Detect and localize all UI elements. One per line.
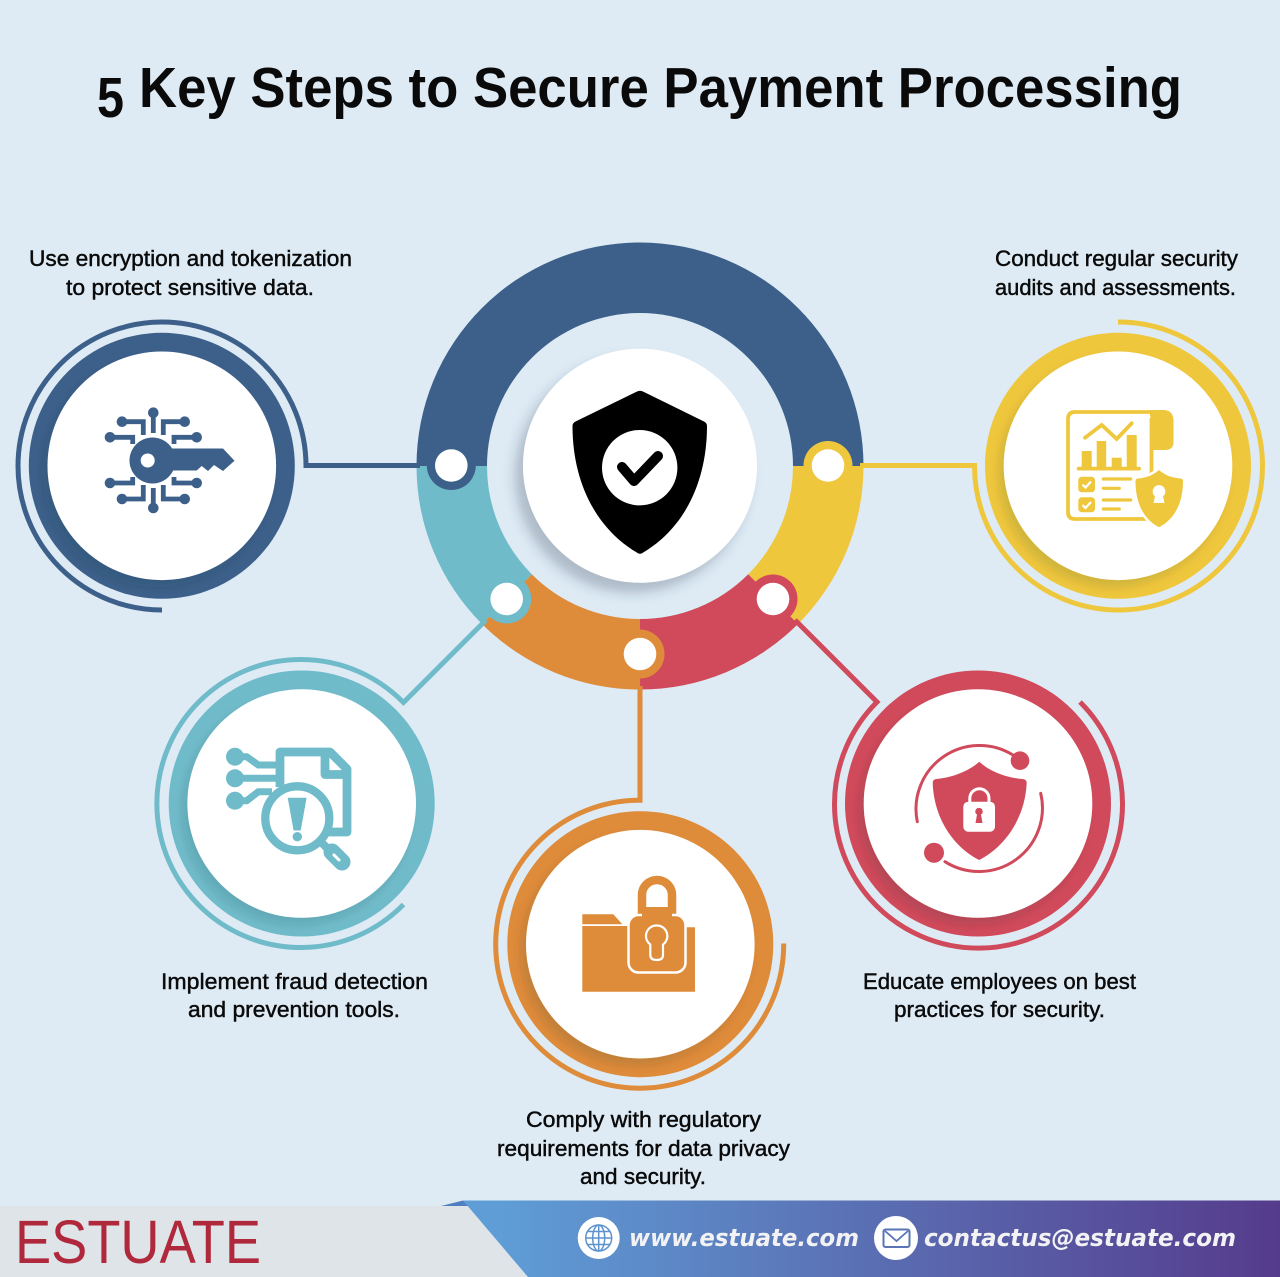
- text: step 4: [497, 1107, 790, 1189]
- text: step 3: Implement fraud detection: [161, 969, 428, 994]
- connector and outer arc: blue: [18, 322, 420, 610]
- text: step 2: audits and assessments.: [995, 275, 1236, 300]
- panel: step 3 fraud detection (teal): [157, 620, 486, 1022]
- knob: orange: [616, 630, 664, 678]
- ring: red: [845, 670, 1111, 936]
- text: step 2: Conduct regular security: [995, 246, 1238, 271]
- ring segment: blue: [416, 243, 864, 466]
- knob: yellow: [804, 441, 852, 490]
- knob: blue: [427, 441, 476, 490]
- icon: document with magnifier alert: [226, 748, 347, 862]
- title: 5: [97, 66, 124, 130]
- connector and outer arc: yellow: [860, 322, 1262, 610]
- white disc: red: [864, 689, 1092, 918]
- ring segment: teal: [416, 466, 532, 624]
- knob: red: [748, 574, 798, 624]
- ring: teal: [169, 670, 435, 936]
- panel: step 4 compliance (orange): [496, 686, 790, 1189]
- ring segment: yellow: [748, 466, 864, 624]
- text: step 2: [995, 246, 1238, 300]
- icon: audit report with shield: [1068, 410, 1183, 527]
- ring: yellow: [985, 333, 1251, 599]
- white disc: orange: [526, 830, 755, 1058]
- icon: envelope: [874, 1216, 918, 1260]
- text: step 1: Use encryption and tokenization: [29, 246, 352, 271]
- panel: step 5 education (red): [795, 620, 1136, 1022]
- text: step 4: requirements for data privacy: [497, 1136, 790, 1161]
- text: step 5: [863, 969, 1136, 1022]
- logo: ESTUATE: ESTUATE: [15, 1208, 261, 1276]
- connector and outer arc: teal: [157, 620, 486, 948]
- icon: folder with padlock: [582, 880, 695, 992]
- text: step 4: Comply with regulatory: [526, 1107, 761, 1132]
- text: step 3: [161, 969, 428, 1022]
- icon: digital key: [105, 407, 234, 513]
- knob: teal: [482, 574, 531, 624]
- icon: black shield with check: [572, 391, 707, 554]
- title: Key Steps to Secure Payment Processing: [139, 56, 1182, 120]
- ring segment: orange: [482, 574, 640, 690]
- ring: orange: [507, 811, 773, 1077]
- text: step 3: and prevention tools.: [188, 997, 400, 1022]
- text: step 5: practices for security.: [894, 997, 1105, 1022]
- text: step 5: Educate employees on best: [863, 969, 1136, 994]
- footer gradient ribbon: [463, 1200, 1280, 1277]
- white disc: teal: [187, 689, 416, 918]
- email: contactus@estuate.com: [924, 1224, 1236, 1252]
- footer ribbon fold: [441, 1200, 468, 1206]
- icon: shield with padlock and orbit: [916, 745, 1042, 872]
- ring: blue: [29, 333, 295, 599]
- ring segment: red: [640, 574, 798, 690]
- connector and outer arc: red: [795, 620, 1123, 948]
- icon: globe: [578, 1217, 620, 1259]
- website: www.estuate.com: [629, 1224, 859, 1252]
- panel: step 1 encryption (blue): [18, 246, 420, 610]
- footer: [0, 1200, 1280, 1277]
- text: step 1: to protect sensitive data.: [66, 275, 314, 300]
- central white disc with shield: [523, 349, 757, 583]
- central segmented ring: [416, 243, 864, 690]
- connector and outer arc: orange: [496, 686, 784, 1088]
- text: step 4: and security.: [580, 1164, 706, 1189]
- footer grey band: [0, 1206, 540, 1277]
- white disc: yellow: [1004, 352, 1232, 580]
- white disc: blue: [48, 352, 276, 580]
- text: step 1: [29, 246, 352, 300]
- panel: step 2 audits (yellow): [860, 246, 1262, 610]
